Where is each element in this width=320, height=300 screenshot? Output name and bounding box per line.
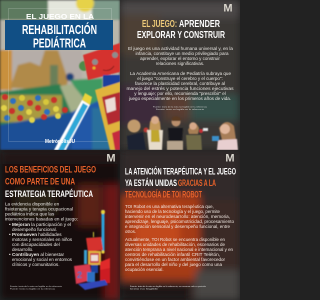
text block: availability: centros de rehabilitación infantil CRIT Telétón,: [125, 252, 220, 257]
text block: academy paragraph: [126, 71, 234, 101]
child 4: [186, 122, 208, 150]
text block: availability: atención temprana a nivel nacional e internacional y en: [125, 247, 234, 252]
bullet list: benefits: con discapacidades del: [12, 242, 60, 247]
text block: toi robot description: otros.: [125, 229, 136, 234]
text block: toi robot description: TOI Robot es una alternativa terapéutica que,: [125, 204, 214, 209]
text block: toi robot description: [125, 204, 235, 234]
bullet list: benefits: Contribuyen al bienestar: [12, 252, 65, 257]
bullet list: benefits: desempeño funcional.: [12, 227, 57, 232]
icon: blue pencil: [54, 93, 92, 150]
text block: evidence intro: [5, 202, 78, 222]
title: estrategia terapéutica: ESTRATEGIA TERAPÉUTICA: [5, 189, 93, 200]
text block: academy paragraph: el juego "construye el cerebro y el cuerpo":: [137, 76, 223, 81]
text block: intro paragraph: relaciones significativas.: [156, 61, 204, 66]
playroom photo background: [0, 0, 120, 150]
ball pit: [1, 94, 68, 123]
panel: rehabilitación pediátrica cover: [0, 0, 120, 150]
heading band: blue: [5, 20, 113, 50]
icon: toy robot with pencil: 2: [77, 270, 82, 280]
dark photo background: [120, 0, 240, 150]
text block: evidence intro: intervenciones basadas en el juego:: [5, 216, 78, 222]
title: pediátrica: PEDIÁTRICA: [33, 36, 86, 50]
text block: intro paragraph: aprender, explorar el entorno y construir: [140, 56, 220, 61]
text block: toi robot description: intervenir en el neurodesarrollo: atención, memoria,: [125, 214, 230, 219]
text block: academy paragraph: manejo del estrés y potencia funciones ejecutivas: [126, 86, 234, 91]
title: beneficios: LOS BENEFICIOS DEL JUEGO: [5, 164, 96, 176]
logo: M badge: M: [225, 152, 235, 164]
logo: metropolis: MetròpolisJU: [45, 139, 75, 145]
title: como parte de una: COMO PARTE DE UNA: [5, 176, 75, 188]
panel: el juego aprender explorar y construir: APRENDER: [179, 19, 221, 30]
child 3: [167, 116, 183, 150]
text block: toi robot description: e integración sensorial y desempeño funcional, entre: [125, 224, 231, 229]
text block: toi robot description: haciendo uso de la tecnología y el juego, permite: [125, 209, 221, 214]
source note: Fuente: texto de la nota no legible en la referencia, se conserva solo su posición: [130, 285, 207, 288]
child 1: [127, 120, 148, 150]
bullet list: benefits: Promueven habilidades: [12, 232, 62, 237]
panel: los beneficios del juego: [0, 150, 120, 300]
bullet list: benefits: •: [9, 232, 11, 237]
photo: children playing: [127, 116, 238, 150]
source note: texto no legible: [130, 288, 159, 290]
title: ya están unidas gracias a la: YA ESTÁN UNIDAS: [125, 178, 177, 189]
text block: intro paragraph: infancia, constituye un medio privilegiado para: [136, 51, 229, 56]
text block: evidence intro: pediátrica indica que las: [5, 212, 55, 216]
bullet list: benefits: •: [9, 222, 11, 227]
text block: availability: diversas unidades de rehabilitación, escenarios de: [125, 242, 226, 247]
text block: academy paragraph: favorece la plasticidad cerebral, contribuye al: [135, 81, 225, 86]
icon: toy robot: [79, 36, 120, 150]
text block: academy paragraph: y lenguaje; por ello, recomienda "prescribir" el: [134, 91, 226, 96]
dark photo background: [0, 150, 120, 300]
white frame line: [8, 8, 112, 142]
bullet list: benefits: clínicos y comunitarios.: [12, 262, 60, 267]
bullet list: benefits: motoras y sensoriales en niños: [12, 237, 73, 242]
child 5: [212, 122, 238, 150]
panel: el juego aprender explorar y construir: [120, 0, 240, 150]
text block: availability: convirtiéndose en un factor ambiental favorecedor: [125, 257, 226, 262]
text block: toi robot description: aprendizaje, lenguaje, psicomotricidad, procesamiento: [125, 219, 235, 224]
source note: Fuente: texto no legible en la referencia: [156, 108, 205, 111]
bullet list: benefits: Mejoran la participación y el: [12, 222, 71, 227]
text block: academy paragraph: juego especialmente en los primeros años de vida.: [128, 96, 231, 101]
photo background with orange glow: [120, 150, 240, 300]
title: el juego aprender: EL JUEGO:: [142, 19, 177, 30]
source note: Fuente: texto no legible en la referencia: [10, 288, 56, 290]
text block: evidence intro: La evidencia disponible en: [5, 202, 60, 206]
text block: academy paragraph: La Academia Americana de Pediatría subraya que: [130, 71, 231, 76]
logo: M badge: M: [223, 2, 233, 14]
source note: Fuente: texto de la nota no legible en la referencia: [153, 106, 208, 108]
panel: atención terapéutica y toi robot: [120, 150, 240, 300]
text block: intro paragraph: El juego es una actividad humana universal y, en la: [128, 46, 234, 51]
text block: intro paragraph: [128, 46, 234, 66]
bullet list: benefits: desarrollo.: [12, 247, 33, 252]
text block: availability: para el desarrollo del niño y del juego como una: [125, 262, 223, 267]
bullet list: benefits: •: [9, 252, 11, 257]
text block: availability: ocupación esencial.: [125, 267, 164, 272]
text block: evidence intro: fisioterapia y terapia ocupacional: [5, 206, 73, 212]
source note: Fuente: texto de la nota no legible en la referencia: [10, 285, 63, 288]
child 2: [147, 116, 163, 150]
source note: [10, 286, 62, 290]
bullet list: benefits: emocional y social en entornos: [12, 257, 73, 262]
bullet list: benefits: [9, 222, 73, 267]
source note: [130, 285, 207, 290]
logo: M badge: M: [106, 152, 116, 164]
text block: availability: [125, 237, 234, 272]
source note: [153, 106, 207, 110]
title: el juego en la: EL JUEGO EN LA: [26, 12, 95, 21]
text block: availability: Actualmente, TOI Robot se encuentra disponible en: [125, 237, 226, 242]
title: rehabilitación: REHABILITACIÓN: [22, 22, 97, 37]
icon: toy robot with pencil: [74, 210, 110, 290]
